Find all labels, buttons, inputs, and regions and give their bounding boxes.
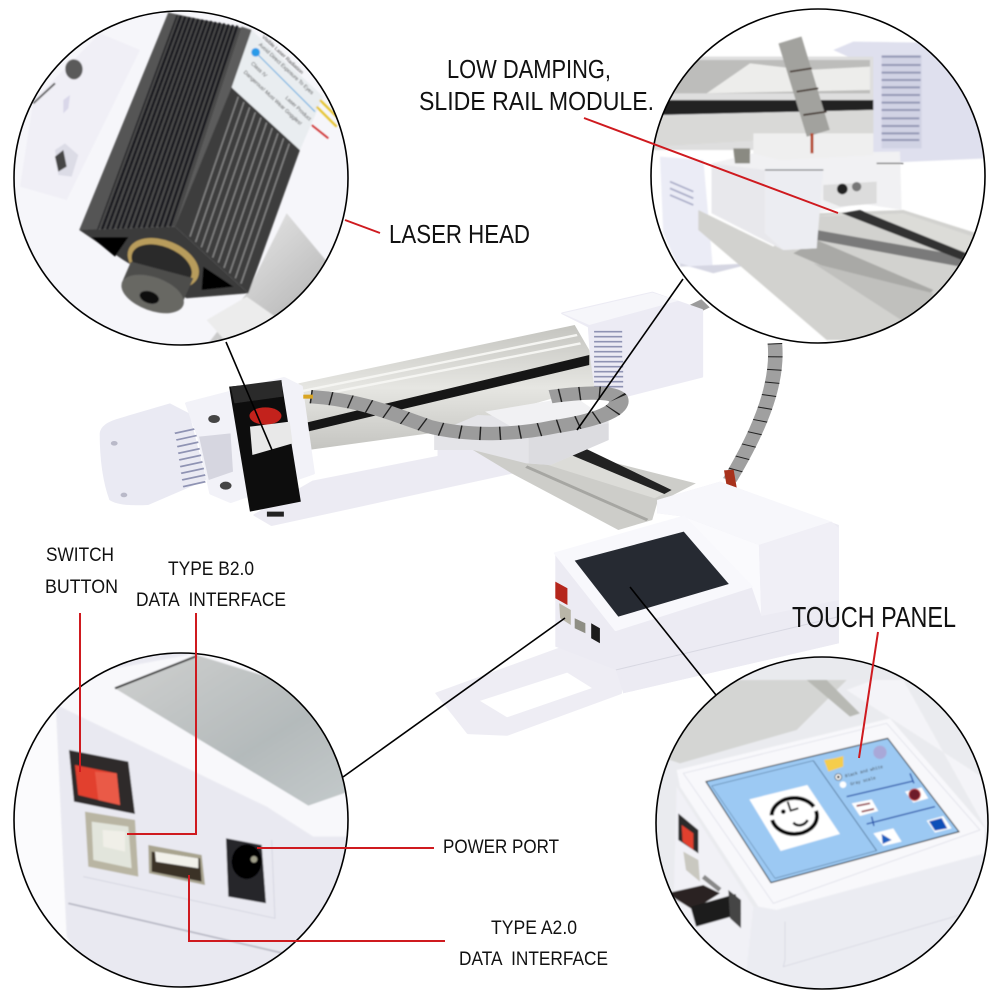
label: low damping slide rail module: SLIDE RAIL MODULE. — [419, 86, 654, 116]
callout line: type B — [127, 613, 196, 834]
machine: dark screen — [575, 532, 729, 617]
panel: slide rail zoom circle — [650, 9, 987, 343]
panel: touch screen zoom circle: Gray scale — [850, 776, 877, 787]
USB B — [85, 812, 138, 877]
panel: laser head zoom circle: Laser Product — [284, 95, 312, 123]
label: type A2.0 data interface: DATA INTERFACE — [459, 949, 608, 970]
label: type B2.0 data interface: DATA INTERFACE — [136, 590, 286, 611]
label: power port: POWER PORT — [443, 837, 559, 858]
machine: centre carriage — [434, 415, 609, 465]
label: type B2.0 data interface — [136, 559, 286, 611]
label: switch button: SWITCH — [46, 545, 114, 566]
cable coil — [790, 40, 818, 133]
machine: cable stub at rear — [664, 303, 706, 323]
label: touch panel: TOUCH PANEL — [792, 602, 956, 634]
main machine illustration — [100, 293, 839, 735]
screen image with logo — [749, 785, 840, 851]
screen — [115, 655, 353, 806]
panel: touch screen zoom circle: Black and white — [845, 765, 884, 779]
label: type A2.0 data interface — [459, 918, 608, 970]
callout line: switch button — [79, 613, 81, 772]
machine: X rail — [298, 325, 594, 450]
touch screen — [706, 738, 959, 883]
machine: vents on rear block — [594, 332, 623, 387]
label: switch button: BUTTON — [45, 577, 118, 598]
side block — [660, 157, 713, 273]
callout line: type A — [189, 875, 445, 941]
machine: base foot — [437, 648, 621, 735]
label: switch button — [45, 545, 118, 598]
label: low damping slide rail module — [419, 54, 654, 116]
callout line: slide rail — [584, 118, 838, 213]
connector: screen to zoom circle — [630, 587, 716, 695]
machine: cable to control box — [729, 343, 775, 490]
connector: laser head to zoom circle — [226, 342, 272, 450]
USB A — [148, 845, 205, 885]
machine: rear end block — [563, 293, 702, 397]
panel: ports zoom circle — [13, 653, 353, 990]
machine: Y rail — [473, 447, 696, 530]
label: type B2.0 data interface: TYPE B2.0 — [168, 559, 254, 580]
panel: laser head zoom circle: Avoid Direct Exposure To Eyes — [257, 42, 315, 96]
machine: left end cap — [100, 403, 206, 505]
front end with pulley — [79, 227, 248, 298]
side switch and cable — [678, 813, 698, 853]
horizontal rail — [650, 57, 873, 150]
connector: slide rail to zoom circle — [577, 279, 683, 430]
connector: ports to zoom circle — [343, 618, 565, 777]
panel: laser head zoom circle: Dangerous! Must Wear Goggles! — [242, 70, 303, 127]
machine: coiled cable — [303, 393, 619, 434]
callout line: power port — [257, 847, 434, 849]
label: low damping slide rail module: LOW DAMPING, — [447, 54, 611, 84]
bezel — [53, 653, 353, 837]
box front — [743, 853, 985, 1000]
panel: laser head zoom circle: Visible Laser Radiation — [260, 34, 304, 76]
heat sink side face — [175, 87, 300, 293]
callout line: touch panel — [859, 632, 878, 758]
panel: touch screen zoom circle — [656, 657, 1000, 1000]
panel: laser head zoom circle: Class IV — [249, 61, 268, 79]
screen controls — [824, 756, 843, 772]
rail below the head — [203, 213, 353, 350]
label: type A2.0 data interface: TYPE A2.0 — [491, 918, 577, 939]
machine: control box — [555, 482, 839, 693]
Y rail — [698, 210, 977, 340]
machine: laser head — [229, 380, 301, 517]
warning label — [232, 30, 323, 150]
switch — [69, 750, 135, 814]
carriage — [715, 152, 902, 212]
label: laser head: LASER HEAD — [389, 219, 530, 249]
callout line: laser head — [345, 220, 380, 233]
power jack — [226, 838, 266, 903]
machine: side ports — [555, 582, 567, 605]
end block — [833, 42, 987, 163]
machine: base bar — [255, 435, 517, 525]
heat sink top face — [79, 13, 252, 233]
panel: laser head zoom circle — [14, 11, 353, 350]
box top bezel — [677, 718, 985, 910]
machine: left plate — [187, 378, 313, 502]
